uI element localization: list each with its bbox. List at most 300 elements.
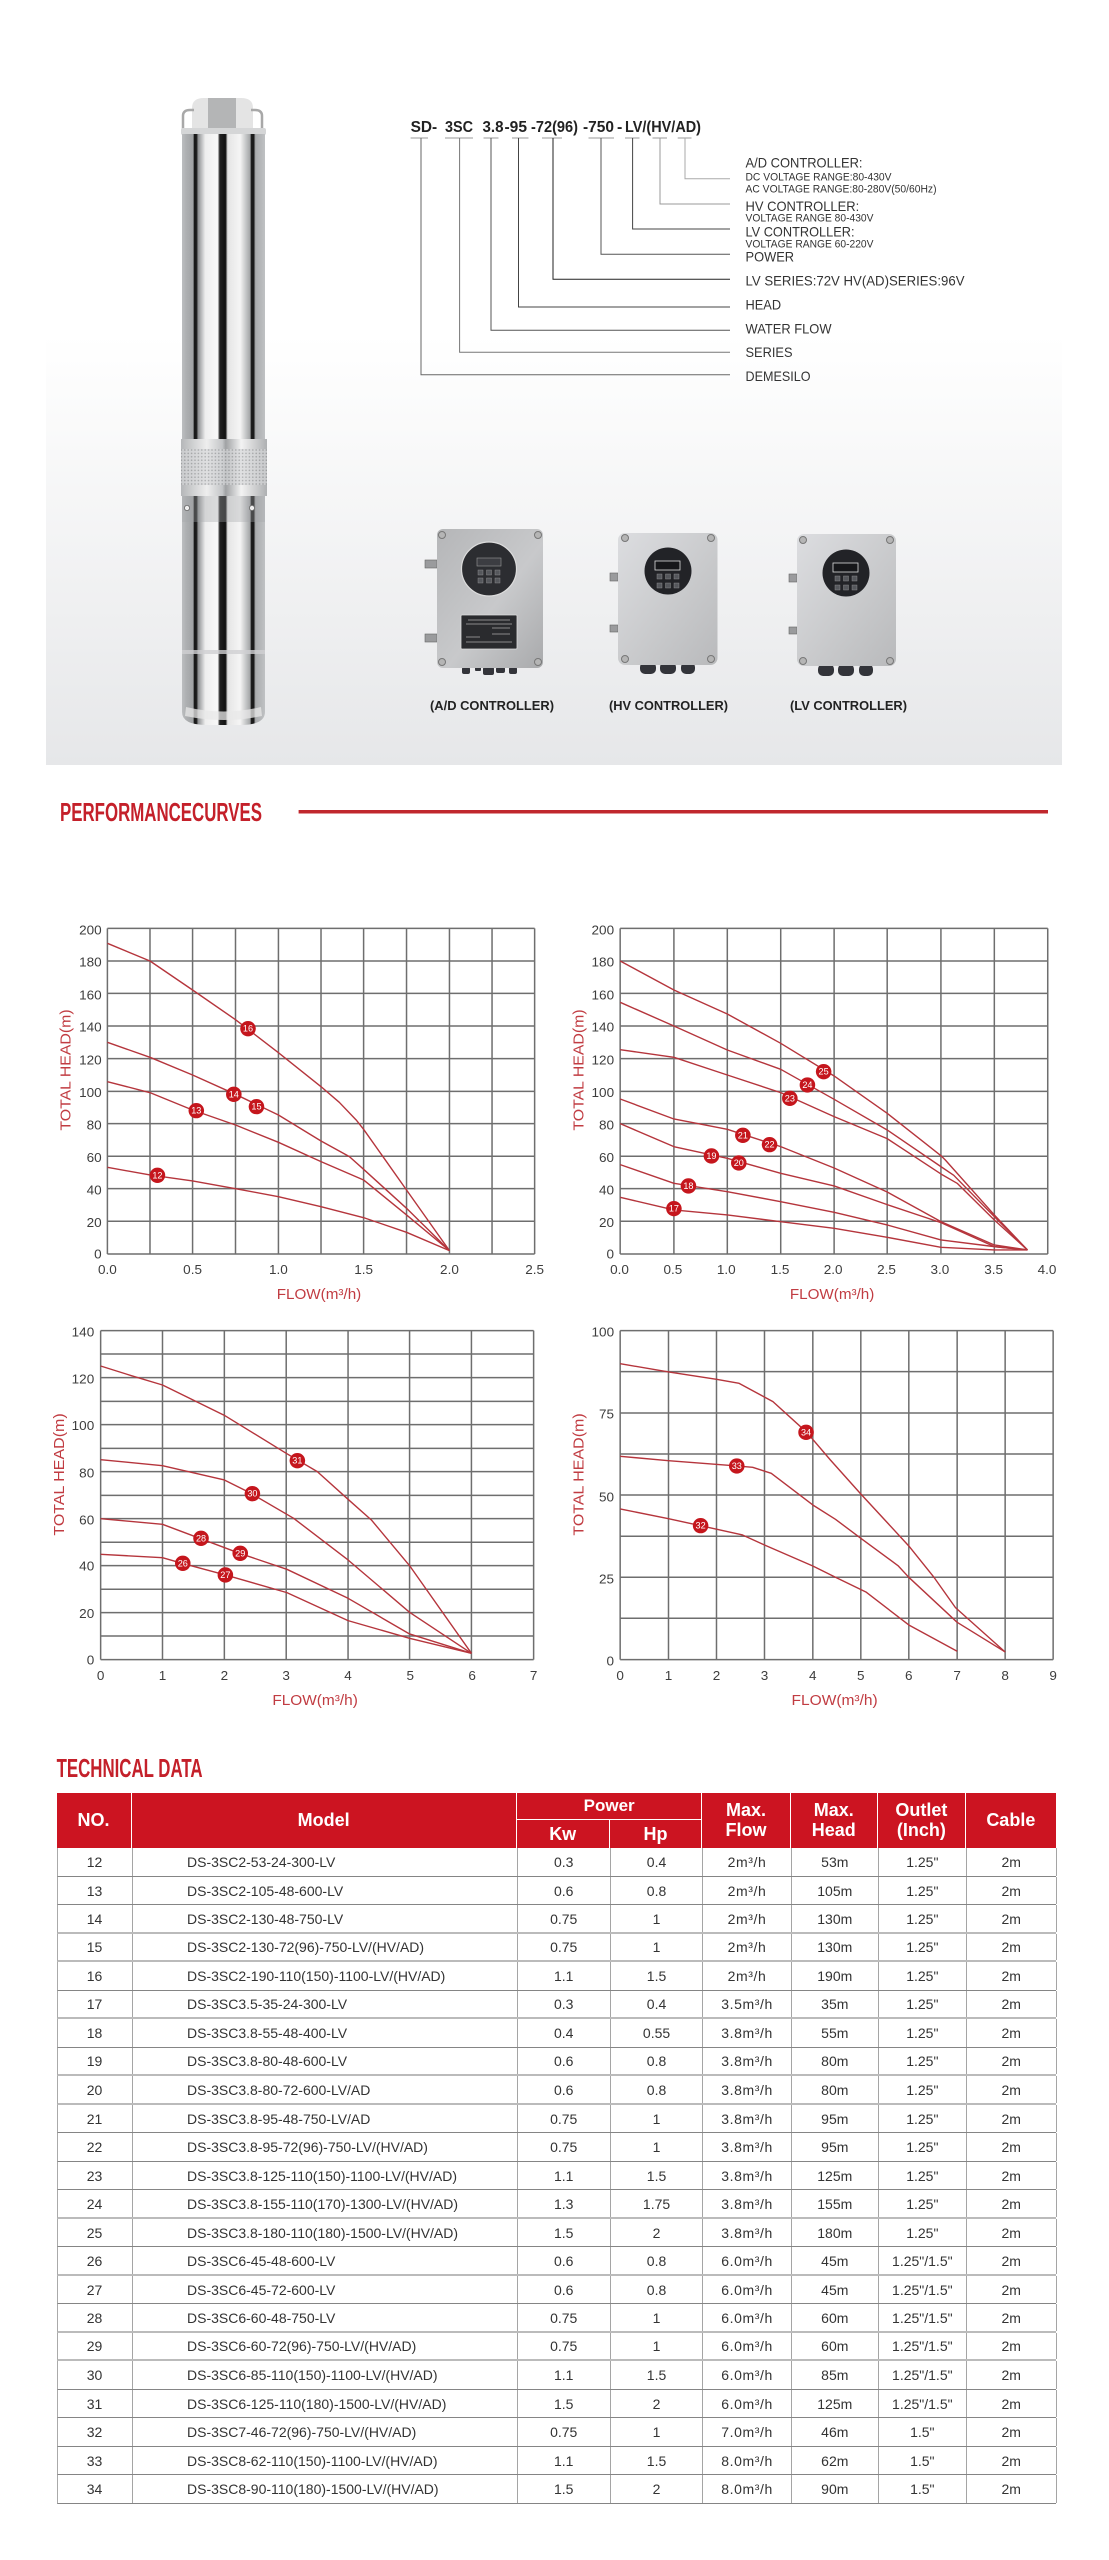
row 20: 20 [87,2082,102,2098]
icon: HV controller [610,533,718,674]
row 33: DS-3SC8-62-110(150)-1100-LV/(HV/AD) [187,2453,438,2469]
row 27: 6.0m³/h [721,2282,773,2298]
row 31: 6.0m³/h [721,2396,773,2412]
row 23 [56,2162,1056,2190]
chart: models 17-25: 0.0 [610,1262,629,1277]
model code title: -72(96) [531,119,578,136]
row 24: 24 [87,2196,102,2212]
chart: models 12-16: 1.0 [269,1262,288,1277]
row 15: 0.75 [550,1939,577,1955]
row 16: 2m [1002,1968,1021,1984]
chart: models 32-34: 4 [809,1668,817,1683]
model code legend: WATER FLOW [746,320,832,336]
row 15: 2m³/h [728,1939,766,1955]
model code legend: DEMESILO [746,368,811,384]
row 29: 2m [1002,2338,1021,2354]
icon: submersible pump [181,98,267,725]
controller captions: (HV CONTROLLER) [609,699,728,713]
chart: models 17-25: 160 [592,987,614,1002]
table header: Kw [549,1824,576,1844]
model code legend [746,154,965,384]
row 13: 2m³/h [728,1883,766,1899]
chart: models 17-25: 80 [599,1117,614,1132]
row 14: 14 [87,1911,102,1927]
row 26: 0.6 [554,2253,573,2269]
row 32: DS-3SC7-46-72(96)-750-LV/(HV/AD) [187,2424,416,2440]
chart: models 17-25: 0.5 [664,1262,682,1277]
model code title: - [617,119,622,136]
row 25: 1.5 [554,2225,573,2241]
row 26: 2m [1002,2253,1021,2269]
row 26: 1.25"/1.5" [892,2253,953,2269]
chart: models 17-25: 120 [592,1052,614,1067]
row 14: 1 [653,1911,660,1927]
row 23: 2m [1002,2168,1021,2184]
chart: models 12-16: 180 [79,955,102,970]
row 12: DS-3SC2-53-24-300-LV [187,1854,335,1870]
heading: technical data: TECHNICAL DATA [57,1753,203,1783]
controller captions [430,699,907,713]
chart: models 32-34: 3 [761,1668,768,1683]
row 30: 85m [821,2367,848,2383]
chart: models 26-31: 60 [79,1512,94,1527]
chart: models 26-31: 27 [220,1570,230,1580]
row 27: 45m [821,2282,848,2298]
chart: models 26-31: 80 [79,1465,94,1480]
row 13: 0.6 [554,1883,573,1899]
model code legend: LV CONTROLLER: [746,223,854,239]
row 28: 1 [653,2310,660,2326]
row 25: 2 [653,2225,660,2241]
row 26: 45m [821,2253,848,2269]
chart: models 32-34: 1 [665,1668,672,1683]
row 33: 1.5 [647,2453,666,2469]
row 20: 3.8m³/h [721,2082,773,2098]
row 14: 2m [1002,1911,1021,1927]
row 14: 1.25" [906,1911,938,1927]
row 26 [56,2247,1056,2276]
row 24: 2m [1002,2196,1021,2212]
table header [56,1793,1056,1848]
row 28: 0.75 [550,2310,577,2326]
row 17: 2m [1002,1996,1021,2012]
row 21: 2m [1002,2111,1021,2127]
model code title: 3.8 [482,119,504,136]
chart: models 26-31: 30 [247,1489,257,1499]
row 17: 3.5m³/h [721,1996,773,2012]
row 33: 1.5" [910,2453,935,2469]
row 33: 8.0m³/h [721,2453,773,2469]
row 24: 1.3 [554,2196,573,2212]
chart: models 17-25: 40 [599,1182,614,1197]
chart: models 12-16: 40 [87,1182,102,1197]
row 12: 2m [1002,1854,1021,1870]
table header: Power [584,1796,635,1815]
chart: models 17-25: 22 [764,1140,775,1150]
row 18 [56,2019,1056,2048]
row 17: 0.4 [647,1996,666,2012]
row 21: 1 [653,2111,660,2127]
row 12: 0.3 [554,1854,573,1870]
row 12 [56,1848,1056,1877]
model code title: -95 [504,119,527,136]
table header: Cable [986,1810,1035,1830]
chart: models 12-16: 200 [79,923,102,938]
chart: models 26-31: 20 [79,1606,94,1621]
row 13 [56,1877,1056,1905]
chart: models 12-16: 160 [79,987,102,1002]
chart: models 26-31: TOTAL HEAD(m) [52,1413,68,1536]
chart: models 17-25: 17 [669,1204,679,1214]
row 34: DS-3SC8-90-110(180)-1500-LV/(HV/AD) [187,2481,439,2497]
row 24: 1.75 [643,2196,670,2212]
row 16: 2m³/h [728,1968,766,1984]
model code legend: VOLTAGE RANGE 80-430V [746,212,874,224]
row 17: 35m [821,1996,848,2012]
chart: models 12-16: 20 [87,1215,102,1230]
chart: models 32-34: 0 [607,1653,614,1668]
icon: LV controller [789,534,896,676]
row 24: 155m [817,2196,852,2212]
row 18: 55m [821,2025,848,2041]
model code legend: AC VOLTAGE RANGE:80-280V(50/60Hz) [746,183,936,195]
row 20 [56,2076,1056,2105]
row 27: 27 [87,2282,102,2298]
row 19: DS-3SC3.8-80-48-600-LV [187,2053,347,2069]
row 28: 1.25"/1.5" [892,2310,953,2326]
chart: models 17-25: 2.0 [824,1262,842,1277]
table header: Outlet [895,1800,947,1820]
model code title [411,119,701,136]
row 29: DS-3SC6-60-72(96)-750-LV/(HV/AD) [187,2338,416,2354]
chart: models 26-31: 2 [221,1668,228,1683]
row 32: 46m [821,2424,848,2440]
row 27: DS-3SC6-45-72-600-LV [187,2282,335,2298]
chart: models 26-31: 4 [344,1668,352,1683]
row 25: 180m [817,2225,852,2241]
row 25: 1.25" [906,2225,938,2241]
chart: models 17-25: 24 [802,1080,812,1090]
chart: models 12-16: 120 [79,1052,102,1067]
row 31: 1.25"/1.5" [892,2396,953,2412]
row 28: 2m [1002,2310,1021,2326]
row 30: 1.1 [554,2367,573,2383]
row 31 [56,2390,1056,2418]
row 23: 23 [87,2168,102,2184]
model code title: -750 [583,119,614,136]
row 34: 1.5 [554,2481,573,2497]
chart: models 26-31: 120 [72,1372,94,1387]
chart: models 17-25: FLOW(m³/h) [790,1287,874,1303]
row 13: DS-3SC2-105-48-600-LV [187,1883,343,1899]
chart: models 32-34: 33 [732,1461,742,1471]
row 29: 0.75 [550,2338,577,2354]
row 34 [56,2475,1056,2504]
row 33: 2m [1002,2453,1021,2469]
row 26: DS-3SC6-45-48-600-LV [187,2253,335,2269]
row 33 [56,2447,1056,2475]
row 17: 1.25" [906,1996,938,2012]
row 23: 1.1 [554,2168,573,2184]
row 19: 0.8 [647,2053,666,2069]
chart: models 17-25: 180 [592,955,614,970]
row 32: 1.5" [910,2424,935,2440]
row 20: 0.8 [647,2082,666,2098]
model code legend: VOLTAGE RANGE 60-220V [746,238,874,250]
chart: models 26-31: 29 [235,1548,245,1558]
chart: models 17-25: TOTAL HEAD(m) [572,1009,588,1131]
chart: models 26-31: 6 [468,1668,476,1683]
chart: models 26-31: 26 [178,1558,188,1568]
row 27: 1.25"/1.5" [892,2282,953,2298]
chart: models 12-16: 14 [229,1089,239,1099]
row 31: DS-3SC6-125-110(180)-1500-LV/(HV/AD) [187,2396,446,2412]
row 20: 2m [1002,2082,1021,2098]
chart: models 32-34: 34 [801,1427,811,1437]
row 28: 6.0m³/h [721,2310,773,2326]
row 13: 2m [1002,1883,1021,1899]
chart: models 32-34: 7 [953,1668,961,1683]
row 18: 0.55 [643,2025,670,2041]
table: technical data [57,1793,1057,2504]
row 12: 12 [87,1854,102,1870]
chart: models 26-31: 100 [72,1418,94,1433]
row 32: 7.0m³/h [721,2424,773,2440]
model code diagram [411,119,965,384]
chart: models 26-31 [52,1325,537,1709]
row 21: 0.75 [550,2111,577,2127]
row 14 [56,1905,1056,1934]
heading: performance curves [60,797,1048,827]
row 15: 1.25" [906,1939,938,1955]
row 27: 0.8 [647,2282,666,2298]
row 16: 1.5 [647,1968,666,1984]
row 29: 1.25"/1.5" [892,2338,953,2354]
row 22: 22 [87,2139,102,2155]
chart: models 17-25: 23 [785,1093,795,1103]
row 15 [56,1934,1056,1962]
row 26: 0.8 [647,2253,666,2269]
chart: models 26-31: 28 [196,1533,206,1543]
row 13: 13 [87,1883,102,1899]
row 17: 0.3 [554,1996,573,2012]
model code legend: SERIES [746,344,792,360]
icon: A/D controller [425,529,543,675]
row 16: 1.25" [906,1968,938,1984]
row 22: 0.75 [550,2139,577,2155]
chart: models 12-16: 2.5 [525,1262,544,1277]
model code legend: DC VOLTAGE RANGE:80-430V [746,172,892,184]
row 22: DS-3SC3.8-95-72(96)-750-LV/(HV/AD) [187,2139,428,2155]
chart: models 17-25: 20 [734,1158,744,1168]
chart: models 26-31: 140 [72,1325,94,1340]
chart: models 32-34: FLOW(m³/h) [792,1693,878,1709]
row 29: 1 [653,2338,660,2354]
row 24: 3.8m³/h [721,2196,773,2212]
row 19: 2m [1002,2053,1021,2069]
row 13: 1.25" [906,1883,938,1899]
row 32: 1 [653,2424,660,2440]
row 31: 2 [653,2396,660,2412]
chart: models 17-25: 140 [592,1020,614,1035]
model code legend: LV SERIES:72V HV(AD)SERIES:96V [746,272,965,288]
chart: models 12-16: 15 [251,1102,262,1112]
chart: models 17-25: 100 [592,1085,614,1100]
row 12: 1.25" [906,1854,938,1870]
row 18: 2m [1002,2025,1021,2041]
row 24: DS-3SC3.8-155-110(170)-1300-LV/(HV/AD) [187,2196,458,2212]
chart: models 12-16: 16 [243,1024,253,1034]
row 24: 1.25" [906,2196,938,2212]
chart: models 32-34: 75 [599,1407,614,1422]
row 22 [56,2133,1056,2162]
chart: models 32-34 [572,1325,1057,1709]
chart: models 26-31: 3 [282,1668,290,1683]
row 25: 2m [1002,2225,1021,2241]
controller captions: (LV CONTROLLER) [790,699,907,713]
chart: models 12-16: 60 [87,1150,102,1165]
row 30: 1.25"/1.5" [892,2367,953,2383]
row 34: 34 [87,2481,102,2497]
chart: models 12-16: 0.0 [98,1262,117,1277]
model code legend: A/D CONTROLLER: [746,154,862,170]
row 21: 21 [87,2111,102,2127]
row 21 [56,2105,1056,2133]
row 19: 3.8m³/h [721,2053,773,2069]
row 24 [56,2190,1056,2219]
chart: models 26-31: FLOW(m³/h) [272,1693,358,1709]
row 30 [56,2361,1056,2390]
chart: models 32-34: 100 [592,1325,614,1340]
chart: models 26-31: 40 [79,1559,94,1574]
chart: models 12-16 [58,923,544,1303]
table header: Max. [814,1800,854,1820]
row 34: 2m [1002,2481,1021,2497]
row 34: 1.5" [910,2481,935,2497]
row 22: 2m [1002,2139,1021,2155]
row 22: 1.25" [906,2139,938,2155]
row 19: 1.25" [906,2053,938,2069]
table header: Flow [726,1820,767,1840]
row 28: 60m [821,2310,848,2326]
row 23: 3.8m³/h [721,2168,773,2184]
row 26: 26 [87,2253,102,2269]
row 25 [56,2219,1056,2247]
row 19 [56,2048,1056,2076]
row 29: 60m [821,2338,848,2354]
row 18: 0.4 [554,2025,573,2041]
row 32: 0.75 [550,2424,577,2440]
chart: models 26-31: 31 [292,1456,302,1466]
chart: models 26-31: 0 [97,1668,104,1683]
row 28 [56,2304,1056,2333]
table header: Max. [726,1800,766,1820]
row 29 [56,2333,1056,2361]
row 16: 190m [817,1968,852,1984]
chart: models 17-25: 3.0 [931,1262,949,1277]
chart: models 26-31: 7 [530,1668,537,1683]
row 21: 1.25" [906,2111,938,2127]
row 15: 15 [87,1939,102,1955]
chart: models 17-25: 18 [683,1181,694,1191]
row 25: 3.8m³/h [721,2225,773,2241]
row 21: DS-3SC3.8-95-48-750-LV/AD [187,2111,370,2127]
row 34: 2 [653,2481,660,2497]
chart: models 12-16: TOTAL HEAD(m) [58,1009,75,1131]
row 16 [56,1962,1056,1991]
chart: models 17-25: 25 [819,1067,829,1077]
chart: models 26-31: 5 [406,1668,414,1683]
model code legend: HV CONTROLLER: [746,198,859,214]
row 15: 130m [817,1939,852,1955]
chart: models 32-34: TOTAL HEAD(m) [572,1413,588,1536]
row 32: 2m [1002,2424,1021,2440]
chart: models 12-16: 1.5 [354,1262,373,1277]
table header: Model [298,1810,350,1830]
chart: models 12-16: FLOW(m³/h) [277,1287,361,1303]
row 32 [56,2418,1056,2447]
model code title: 3SC [445,119,473,136]
row 33: 1.1 [554,2453,573,2469]
chart: models 26-31: 0 [87,1653,94,1668]
row 17: DS-3SC3.5-35-24-300-LV [187,1996,347,2012]
row 21: 95m [821,2111,848,2127]
row 22: 3.8m³/h [721,2139,773,2155]
row 18: 1.25" [906,2025,938,2041]
row 29: 6.0m³/h [721,2338,773,2354]
row 29: 29 [87,2338,102,2354]
row 20: 80m [821,2082,848,2098]
row 31: 31 [87,2396,102,2412]
row 31: 125m [817,2396,852,2412]
model code legend: POWER [746,249,794,265]
row 22: 95m [821,2139,848,2155]
row 12: 2m³/h [728,1854,766,1870]
row 30: 2m [1002,2367,1021,2383]
chart: models 17-25: 19 [706,1151,716,1161]
row 33: 33 [87,2453,102,2469]
chart: models 32-34: 8 [1001,1668,1009,1683]
row 18: 18 [87,2025,102,2041]
chart: models 12-16: 80 [87,1117,102,1132]
table header: (Inch) [897,1820,946,1840]
row 17: 17 [87,1996,102,2012]
table header: Head [812,1820,856,1840]
row 30: 6.0m³/h [721,2367,773,2383]
chart: models 17-25: 200 [592,923,614,938]
row 23: 125m [817,2168,852,2184]
panel: product background [46,335,1062,765]
row 18: 3.8m³/h [721,2025,773,2041]
row 34: 8.0m³/h [721,2481,773,2497]
row 21: 3.8m³/h [721,2111,773,2127]
row 19: 80m [821,2053,848,2069]
table header: NO. [77,1810,110,1830]
chart: models 17-25: 1.0 [717,1262,736,1277]
row 25: 25 [87,2225,102,2241]
row 14: 2m³/h [728,1911,766,1927]
row 27: 0.6 [554,2282,573,2298]
row 15: DS-3SC2-130-72(96)-750-LV/(HV/AD) [187,1939,424,1955]
row 12: 53m [821,1854,848,1870]
chart: models 12-16: 0 [94,1247,102,1262]
chart: models 12-16: 12 [152,1170,163,1180]
controller captions: (A/D CONTROLLER) [430,699,554,713]
row 30: DS-3SC6-85-110(150)-1100-LV/(HV/AD) [187,2367,438,2383]
heading: performance curves: PERFORMANCECURVES [60,797,262,827]
chart: models 32-34: 0 [616,1668,624,1683]
row 20: 1.25" [906,2082,938,2098]
